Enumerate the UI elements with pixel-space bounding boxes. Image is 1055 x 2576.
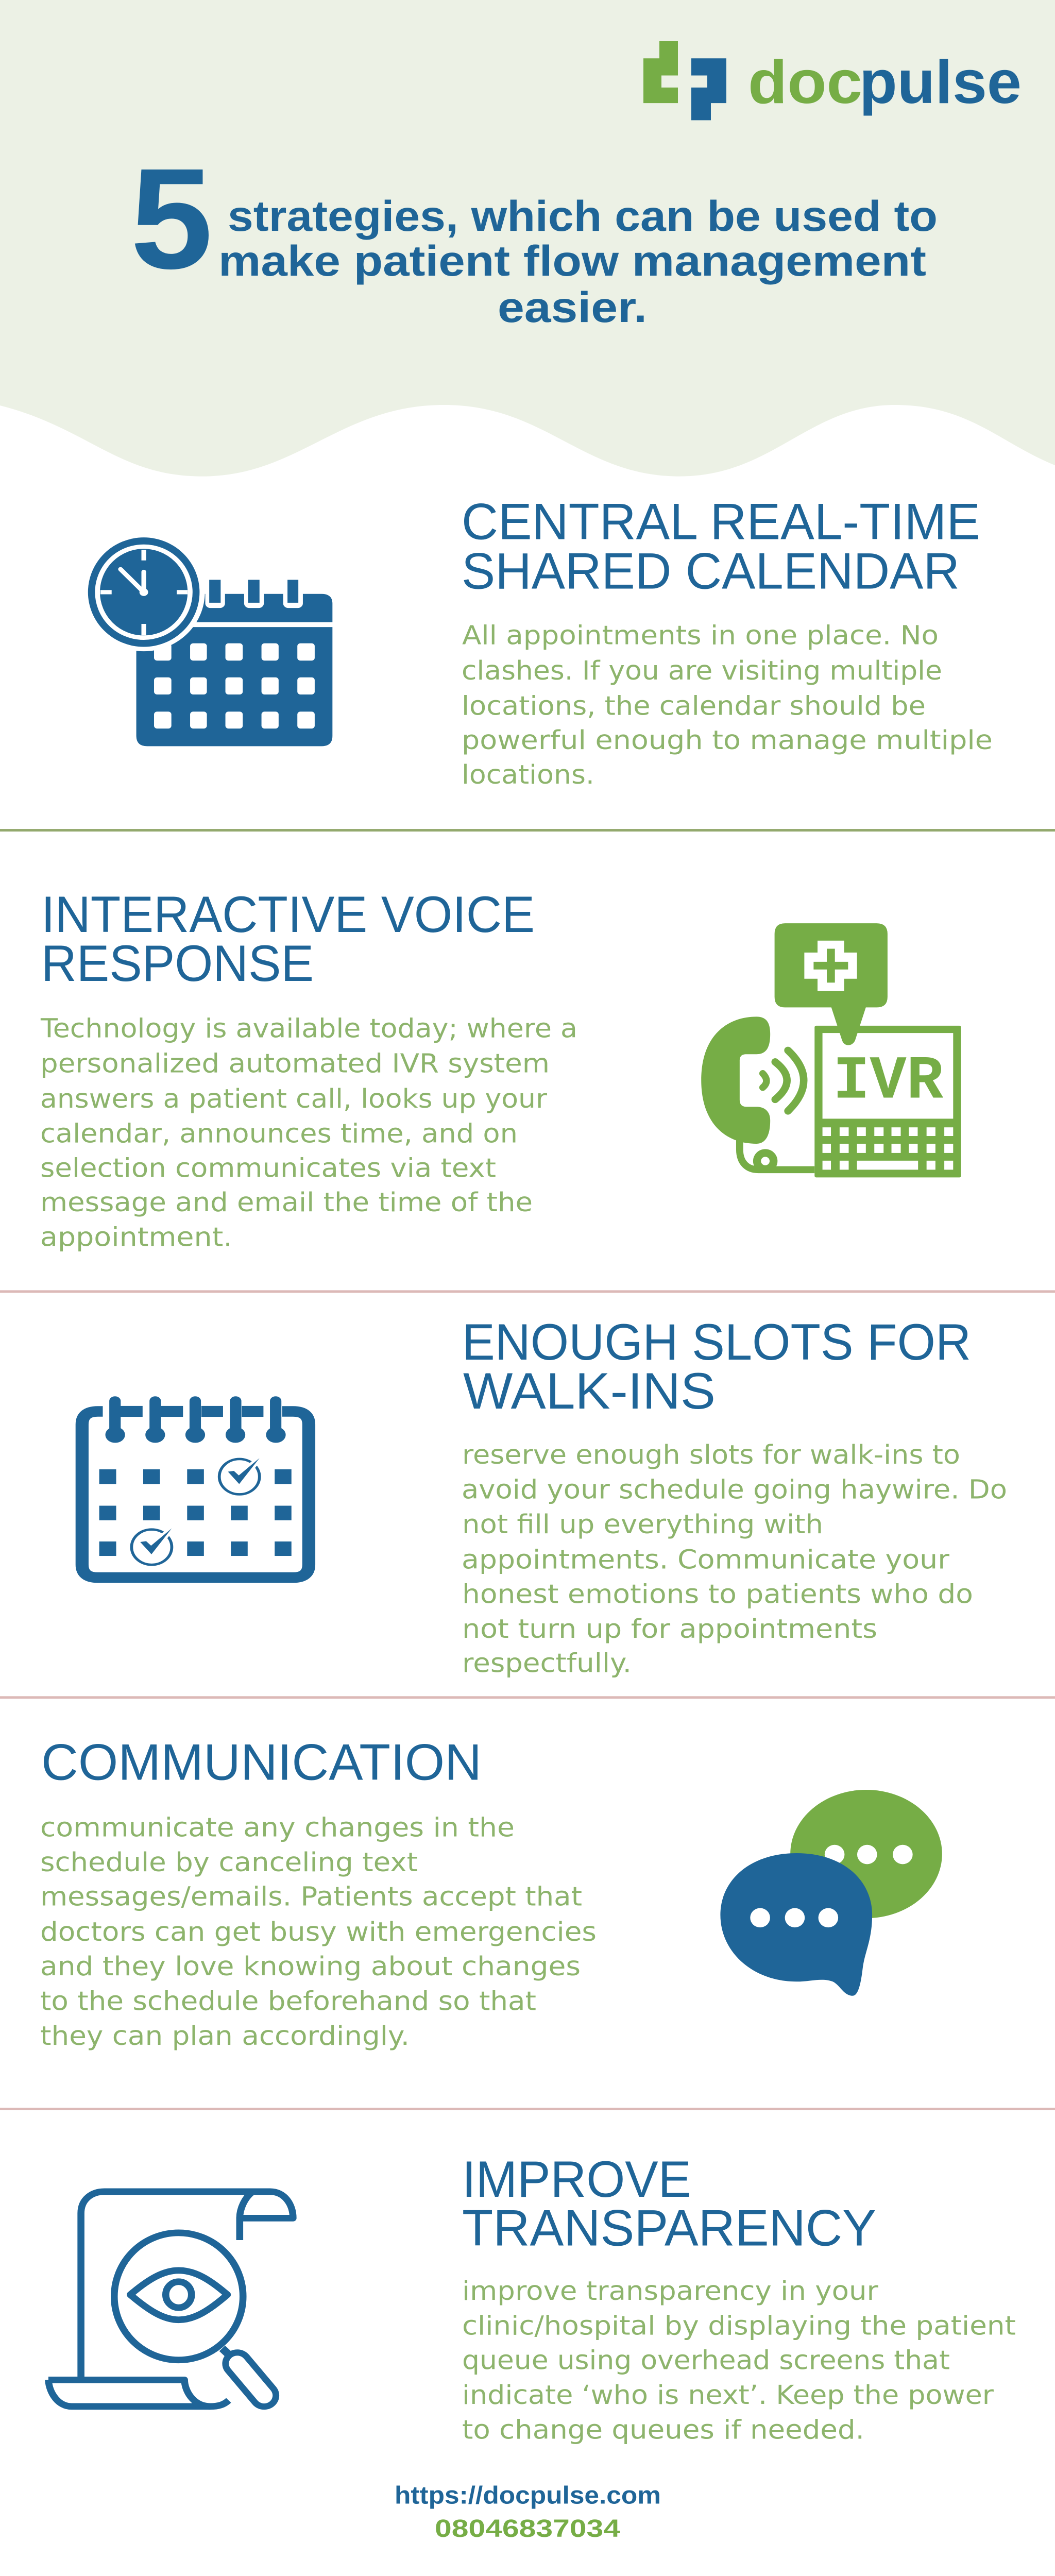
body text: locations, the calendar should be	[462, 691, 926, 721]
body text: powerful enough to manage multiple	[462, 725, 993, 756]
body text: selection communicates via text	[40, 1153, 496, 1184]
heading: ENOUGH SLOTS FOR	[462, 1314, 971, 1371]
body text: All appointments in one place. No	[462, 620, 939, 651]
panel: interactive voice response	[40, 886, 961, 1252]
title	[130, 138, 938, 332]
footer contact: https://docpulse.com	[395, 2482, 661, 2509]
body text: queue using overhead screens that	[462, 2345, 950, 2376]
heading: COMMUNICATION	[41, 1734, 482, 1791]
body text: indicate ‘who is next’. Keep the power	[462, 2380, 994, 2411]
heading: WALK-INS	[463, 1363, 716, 1420]
icon: calendar with checkmarks	[82, 1396, 309, 1578]
body text	[40, 1013, 577, 1252]
panel: improve transparency	[48, 2151, 1016, 2445]
panel: enough slots for walk-ins	[82, 1314, 1007, 1679]
body text: and they love knowing about changes	[40, 1952, 581, 1982]
title: easier.	[498, 283, 647, 332]
body text: calendar, announces time, and on	[40, 1118, 518, 1149]
body text	[462, 1440, 1007, 1679]
heading: INTERACTIVE VOICE	[41, 886, 535, 943]
body text: appointment.	[40, 1222, 232, 1252]
body text: not turn up for appointments	[462, 1614, 877, 1645]
body text: they can plan accordingly.	[40, 2021, 410, 2052]
title: 5	[130, 138, 213, 299]
body text: clashes. If you are visiting multiple	[462, 656, 942, 686]
body text: Technology is available today; where a	[40, 1013, 577, 1044]
body text: respectfully.	[462, 1648, 632, 1679]
logo: docpulse: pulse	[859, 47, 1022, 116]
heading	[462, 494, 980, 600]
title: strategies, which can be used to	[228, 192, 938, 241]
heading	[462, 2151, 876, 2257]
title: make patient flow management	[218, 237, 926, 285]
body text: schedule by canceling text	[40, 1848, 418, 1878]
body text: avoid your schedule going haywire. Do	[462, 1475, 1007, 1505]
logo: docpulse	[643, 41, 1022, 120]
footer contact	[395, 2482, 661, 2543]
body text: not fill up everything with	[462, 1510, 823, 1540]
body text: improve transparency in your	[462, 2276, 879, 2307]
icon: calendar with clock	[82, 533, 333, 746]
body text: doctors can get busy with emergencies	[40, 1917, 597, 1947]
heading: SHARED CALENDAR	[462, 543, 960, 600]
panel: communication	[40, 1734, 942, 2052]
body text: communicate any changes in the	[40, 1812, 515, 1843]
body text: personalized automated IVR system	[40, 1048, 550, 1079]
icon: IVR phone system	[701, 923, 961, 1177]
footer contact: 08046837034	[435, 2515, 620, 2543]
icon: IVR phone system: IVR	[833, 1047, 944, 1116]
icon: chat bubbles	[720, 1790, 942, 1996]
heading: TRANSPARENCY	[462, 2200, 876, 2257]
heading: RESPONSE	[41, 935, 314, 992]
body text: clinic/hospital by displaying the patient	[462, 2311, 1016, 2341]
body text: message and email the time of the	[40, 1188, 533, 1218]
body text: messages/emails. Patients accept that	[40, 1882, 582, 1912]
heading: IMPROVE	[462, 2151, 691, 2208]
panel: central real-time shared calendar	[82, 494, 993, 790]
body text: appointments. Communicate your	[462, 1545, 950, 1575]
body text: honest emotions to patients who do	[462, 1579, 973, 1610]
heading	[41, 886, 535, 992]
body text: locations.	[462, 760, 594, 790]
heading: CENTRAL REAL-TIME	[462, 494, 980, 550]
body text: to change queues if needed.	[462, 2415, 864, 2445]
body text	[40, 1812, 597, 2052]
body text	[462, 2276, 1016, 2445]
header wave background	[0, 0, 1055, 477]
body text: reserve enough slots for walk-ins to	[462, 1440, 960, 1470]
icon: document with magnifier and eye	[48, 2192, 293, 2406]
heading	[462, 1314, 971, 1420]
body text: answers a patient call, looks up your	[40, 1084, 548, 1114]
body text	[462, 620, 993, 790]
logo: docpulse: doc	[748, 47, 862, 116]
body text: to the schedule beforehand so that	[40, 1986, 536, 2016]
